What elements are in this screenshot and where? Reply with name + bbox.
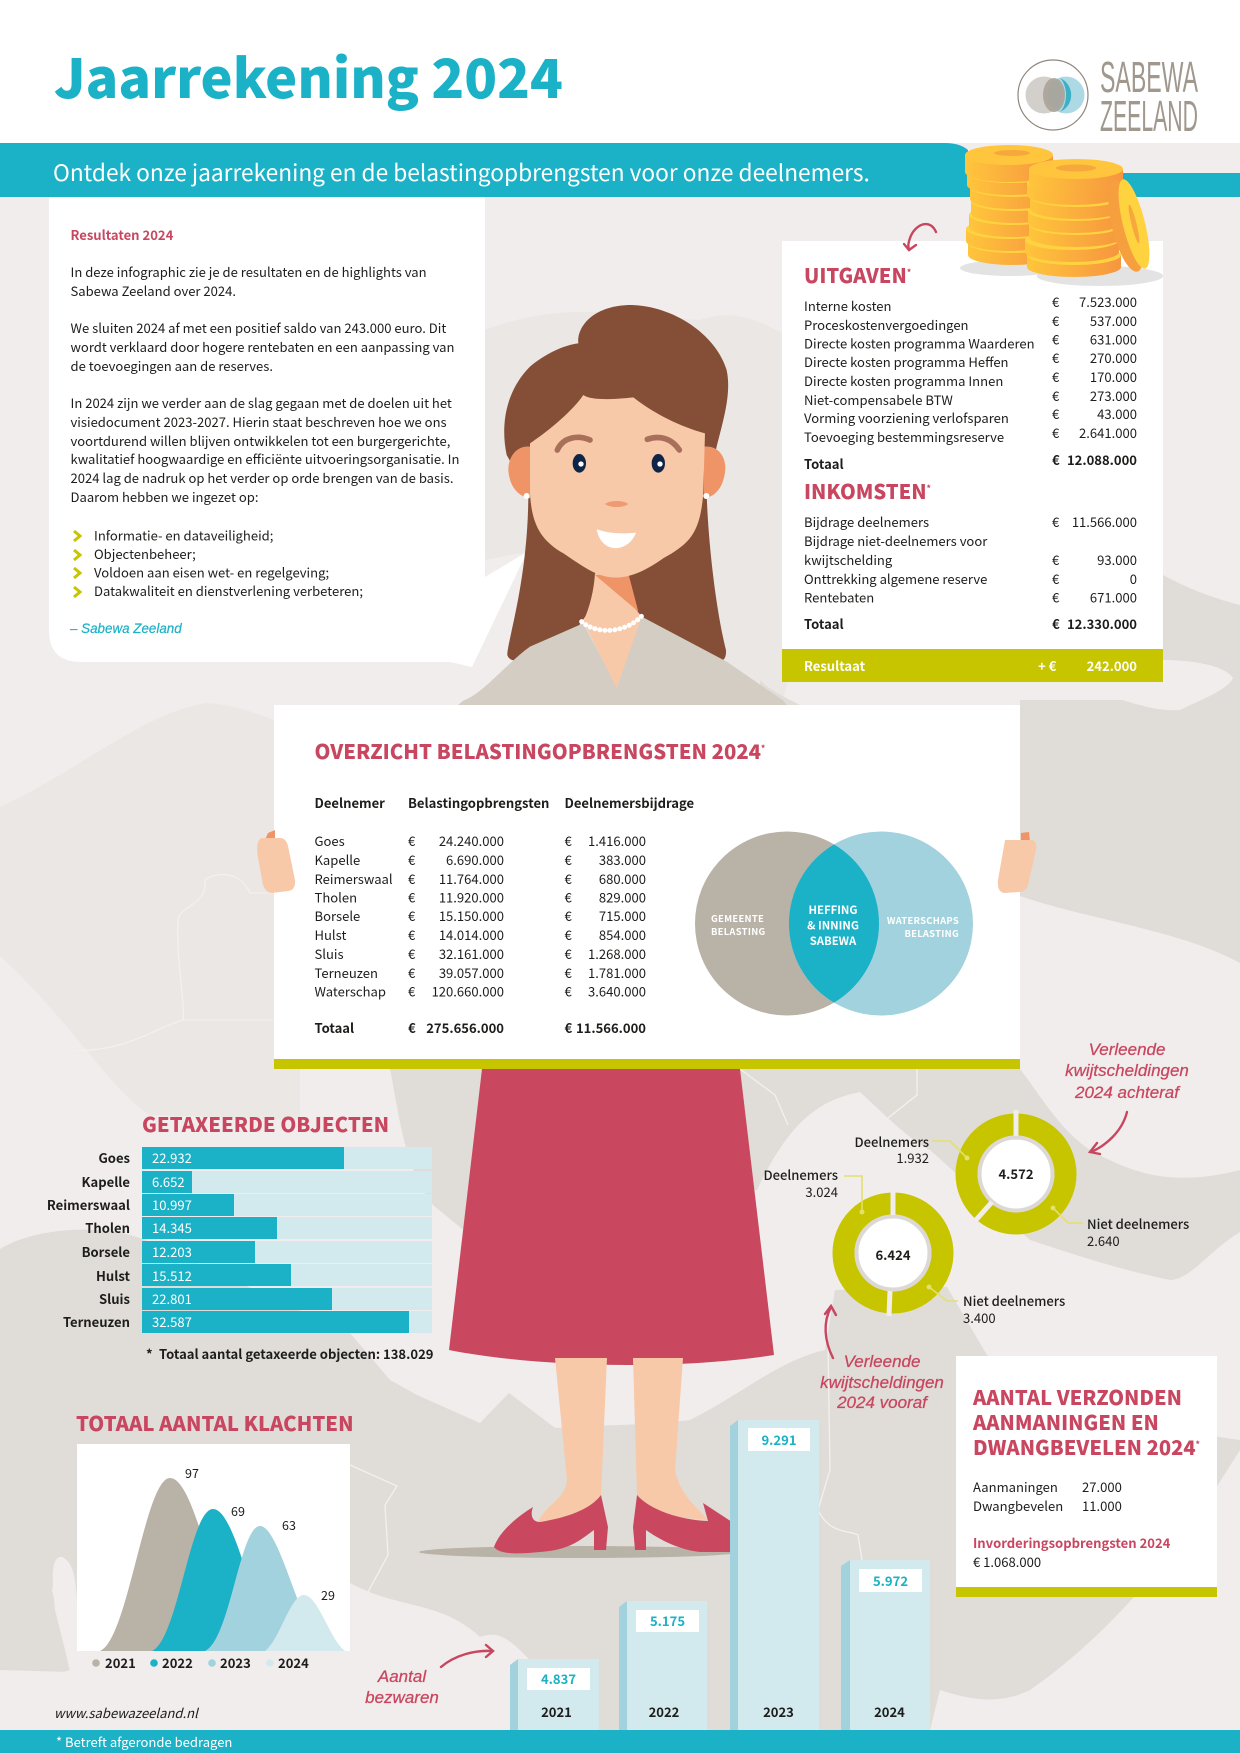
hand left <box>257 830 295 893</box>
table: belastingopbrengsten: Belastingopbrengsten <box>408 793 549 812</box>
bar labels: 14.345 <box>152 1218 192 1237</box>
table: belastingopbrengsten: € <box>408 925 416 944</box>
venn diagram: SABEWA <box>810 933 857 949</box>
table: uitgaven: Proceskostenvergoedingen <box>804 315 969 334</box>
table: belastingopbrengsten: Borsele <box>314 906 360 925</box>
table: belastingopbrengsten: 11.566.000 <box>576 1018 646 1037</box>
bar labels: Sluis <box>99 1289 131 1308</box>
hand right <box>998 832 1036 893</box>
bar 2022 <box>619 1601 707 1730</box>
panel: overzicht belastingopbrengsten <box>274 705 1020 1069</box>
body text <box>70 262 459 506</box>
table: belastingopbrengsten: 1.781.000 <box>588 963 646 982</box>
table: uitgaven: Toevoeging bestemmingsreserve <box>804 427 1004 446</box>
table: belastingopbrengsten: Hulst <box>314 925 346 944</box>
table: inkomsten: Rentebaten <box>804 588 874 606</box>
signature: – Sabewa Zeeland <box>69 621 182 636</box>
legend: 2022 <box>162 1653 193 1672</box>
table: belastingopbrengsten: € <box>408 888 416 906</box>
table: uitgaven: € <box>1052 423 1060 442</box>
heading: aanmaningen: DWANGBEVELEN 2024 <box>973 1432 1196 1461</box>
value labels <box>185 1463 335 1604</box>
counts: 11.000 <box>1082 1496 1122 1515</box>
table: belastingopbrengsten: € <box>564 944 572 963</box>
bullet list: Voldoen aan eisen wet- en regelgeving; <box>94 562 329 582</box>
bar labels: 10.997 <box>152 1195 192 1214</box>
table: belastingopbrengsten: € <box>408 1018 416 1037</box>
table: belastingopbrengsten: 680.000 <box>599 869 646 888</box>
invordering <box>973 1533 1171 1571</box>
table: inkomsten: € <box>1052 588 1060 606</box>
table: belastingopbrengsten: Deelnemer <box>314 793 385 812</box>
panel: aanmaningen en dwangbevelen <box>956 1356 1217 1597</box>
callout: kwijtscheldingen vooraf <box>820 1306 944 1412</box>
table: belastingopbrengsten: € <box>564 963 572 982</box>
counts: Aanmaningen <box>973 1477 1058 1496</box>
table: uitgaven: Niet-compensabele BTW <box>804 390 953 409</box>
table: uitgaven: € <box>1052 292 1060 311</box>
subtitle band: Ontdek onze jaarrekening en de belastingopbrengsten voor onze deelnemers. <box>53 155 870 188</box>
callout: aantal bezwaren: bezwaren <box>365 1688 439 1707</box>
header white area <box>0 0 1240 143</box>
table: inkomsten: Totaal <box>804 614 844 633</box>
table: uitgaven: € <box>1052 348 1060 367</box>
table: belastingopbrengsten: € <box>564 831 572 850</box>
heading: klachten: TOTAAL AANTAL KLACHTEN <box>76 1407 354 1437</box>
table: belastingopbrengsten: € <box>564 906 572 925</box>
illustration: woman upper body <box>452 305 791 710</box>
body text: de toevoegingen aan de reserves. <box>70 356 273 375</box>
table: uitgaven: Directe kosten programma Innen <box>804 371 1003 390</box>
body text: visiedocument 2023-2027. Hierin staat beschreven hoe we ons <box>70 412 447 431</box>
table: belastingopbrengsten: € <box>564 850 572 869</box>
chart: getaxeerde objecten <box>47 1108 434 1363</box>
table: inkomsten: 93.000 <box>1097 550 1137 569</box>
table: belastingopbrengsten: Reimerswaal <box>314 869 393 888</box>
venn diagram: GEMEENTE <box>711 911 764 925</box>
table: belastingopbrengsten: 14.014.000 <box>439 925 504 944</box>
table: belastingopbrengsten: 3.640.000 <box>588 982 646 1000</box>
bar 2024 <box>841 1560 930 1730</box>
body text: kwalitatief hoogwaardige en efficiënte uitvoeringsorganisatie. In <box>70 449 459 468</box>
bar labels: 12.203 <box>152 1242 192 1261</box>
heading: overzicht: * <box>761 743 765 754</box>
bar labels: 32.587 <box>152 1312 192 1331</box>
donut: kwijtscheldingen vooraf: 6.424 <box>875 1245 911 1264</box>
bar labels: Kapelle <box>82 1172 130 1191</box>
counts <box>973 1477 1122 1515</box>
bar 2023 <box>730 1420 819 1730</box>
bar 2024: 5.972 <box>873 1571 908 1590</box>
table: belastingopbrengsten: Goes <box>314 831 345 850</box>
donut: kwijtscheldingen achteraf: Niet deelnemers <box>1087 1214 1189 1233</box>
table: inkomsten: kwijtschelding <box>804 550 893 569</box>
venn diagram: BELASTING <box>711 924 766 938</box>
value labels: 63 <box>282 1515 296 1534</box>
bar labels: Reimerswaal <box>47 1195 130 1214</box>
table: belastingopbrengsten: € <box>408 850 416 869</box>
donut: kwijtscheldingen vooraf: Deelnemers <box>763 1165 838 1184</box>
callout: aantal bezwaren <box>365 1645 493 1707</box>
heading: inkomsten: INKOMSTEN <box>804 476 927 505</box>
bar labels: 22.932 <box>152 1148 192 1167</box>
table: inkomsten: 11.566.000 <box>1072 512 1137 531</box>
value labels: 29 <box>321 1585 335 1604</box>
body text: In deze infographic zie je de resultaten en de highlights van <box>70 262 427 281</box>
bullet list: Informatie- en dataveiligheid; <box>94 526 273 544</box>
table: uitgaven: 631.000 <box>1090 330 1137 348</box>
footer band <box>0 1730 1240 1753</box>
value labels: 69 <box>231 1501 245 1520</box>
table: uitgaven: Directe kosten programma Heffen <box>804 352 1009 371</box>
table: uitgaven: 170.000 <box>1090 367 1137 386</box>
table: belastingopbrengsten: € <box>408 963 416 982</box>
bar labels: Terneuzen <box>63 1312 130 1331</box>
table: uitgaven: Vorming voorziening verlofsparen <box>804 408 1009 427</box>
callout: kwijtscheldingen achteraf: kwijtscheldingen <box>1065 1061 1189 1080</box>
table: belastingopbrengsten: 6.690.000 <box>446 850 504 869</box>
body text: 2024 lag de nadruk op het verder op orde brengen van de basis. <box>70 468 453 487</box>
callout: kwijtscheldingen achteraf: Verleende <box>1089 1040 1165 1059</box>
callout: kwijtscheldingen achteraf <box>1065 1040 1189 1154</box>
area: 2021 <box>100 1478 240 1651</box>
heading: getaxeerde objecten: GETAXEERDE OBJECTEN <box>142 1108 389 1138</box>
venn diagram: HEFFING <box>808 902 858 918</box>
bar 2023: 2023 <box>763 1702 794 1721</box>
table: belastingopbrengsten: € <box>564 888 572 906</box>
table: uitgaven: 12.088.000 <box>1067 450 1137 469</box>
callout: kwijtscheldingen vooraf: 2024 vooraf <box>836 1393 929 1412</box>
legend: 2021 <box>105 1653 136 1672</box>
table: uitgaven: Directe kosten programma Waarderen <box>804 334 1035 352</box>
table: uitgaven: 273.000 <box>1090 386 1137 405</box>
result row: + € <box>1038 656 1057 675</box>
legend: 2023 <box>220 1653 251 1672</box>
table: inkomsten: Onttrekking algemene reserve <box>804 569 987 588</box>
body text: Daarom hebben we ingezet op: <box>70 487 258 506</box>
body text: voortdurend willen blijven ontwikkelen tot een burgergerichte, <box>70 431 450 450</box>
heading: uitgaven: UITGAVEN <box>804 260 907 289</box>
table: belastingopbrengsten: € <box>408 831 416 850</box>
donut: kwijtscheldingen achteraf: Deelnemers <box>854 1132 929 1151</box>
table: inkomsten: € <box>1052 614 1060 633</box>
legend: 2024 <box>278 1653 309 1672</box>
table: belastingopbrengsten: € <box>408 869 416 888</box>
table: uitgaven: € <box>1052 311 1060 330</box>
table: belastingopbrengsten: 854.000 <box>599 925 646 944</box>
heading: inkomsten: * <box>927 483 931 494</box>
callout: kwijtscheldingen achteraf: 2024 achteraf <box>1074 1083 1181 1102</box>
panel: resultaten 2024 <box>49 197 527 667</box>
chart: aantal bezwaren bars <box>510 1420 930 1730</box>
table: inkomsten: Bijdrage deelnemers <box>804 512 929 531</box>
table: belastingopbrengsten: € <box>408 906 416 925</box>
table: inkomsten: € <box>1052 569 1060 588</box>
callout: kwijtscheldingen vooraf: kwijtscheldingen <box>820 1373 944 1392</box>
counts: 27.000 <box>1082 1477 1122 1496</box>
donut: kwijtscheldingen vooraf: Niet deelnemers <box>963 1291 1065 1310</box>
table: uitgaven: € <box>1052 367 1060 386</box>
table: uitgaven: € <box>1052 404 1060 423</box>
area: 2023 <box>205 1526 325 1651</box>
table: belastingopbrengsten: Sluis <box>314 944 344 963</box>
table: inkomsten <box>804 512 1137 633</box>
bullet list: Datakwaliteit en dienstverlening verbeteren; <box>94 581 363 600</box>
table: inkomsten: € <box>1052 550 1060 569</box>
table: belastingopbrengsten: 1.268.000 <box>588 944 646 963</box>
table: belastingopbrengsten: 39.057.000 <box>439 963 504 982</box>
table: inkomsten: 671.000 <box>1090 588 1137 606</box>
table: belastingopbrengsten: € <box>408 944 416 963</box>
total note: * <box>146 1344 153 1363</box>
bar 2021: 2021 <box>541 1702 572 1721</box>
table: uitgaven: € <box>1052 386 1060 405</box>
icon: coin stacks <box>960 145 1163 286</box>
bullet list: Objectenbeheer; <box>94 544 196 563</box>
illustration: legs and shoes <box>419 1358 741 1558</box>
legend <box>92 1653 309 1672</box>
table: uitgaven: 43.000 <box>1097 404 1137 423</box>
table: belastingopbrengsten: € <box>564 982 572 1000</box>
heading: aanmaningen: AANMANINGEN EN <box>972 1407 1159 1436</box>
heading: overzicht: OVERZICHT BELASTINGOPBRENGSTEN 2024 <box>314 735 761 765</box>
result row <box>804 656 1137 675</box>
table: belastingopbrengsten: 15.150.000 <box>439 906 504 925</box>
table: belastingopbrengsten: 383.000 <box>599 850 646 869</box>
table: inkomsten: € <box>1052 512 1060 531</box>
footer band: * Betreft afgeronde bedragen <box>56 1732 232 1751</box>
bar 2021: 4.837 <box>541 1669 576 1688</box>
invordering: € 1.068.000 <box>973 1552 1041 1571</box>
total note: Totaal aantal getaxeerde objecten: 138.029 <box>159 1344 434 1363</box>
chart: totaal aantal klachten <box>76 1407 354 1672</box>
table: belastingopbrengsten: 120.660.000 <box>432 982 504 1000</box>
donut: kwijtscheldingen vooraf: 3.024 <box>805 1182 838 1201</box>
table: uitgaven: € <box>1052 330 1060 348</box>
table: belastingopbrengsten: Waterschap <box>314 982 386 1000</box>
bar labels <box>47 1148 192 1331</box>
heading: resultaten: Resultaten 2024 <box>70 225 174 244</box>
heading: aanmaningen: AANTAL VERZONDEN <box>972 1382 1182 1411</box>
table: inkomsten: 0 <box>1130 569 1137 588</box>
value labels: 97 <box>185 1463 199 1482</box>
table: belastingopbrengsten: € <box>564 869 572 888</box>
donut: kwijtscheldingen vooraf: 3.400 <box>963 1308 996 1327</box>
result row: 242.000 <box>1087 656 1137 675</box>
arrow: to uitgaven <box>904 224 936 250</box>
bars <box>142 1147 432 1333</box>
table: uitgaven: € <box>1052 450 1060 469</box>
table: belastingopbrengsten: 829.000 <box>599 888 646 906</box>
venn diagram: WATERSCHAPS <box>887 913 959 927</box>
subtitle band <box>0 143 1240 197</box>
area: 2022 <box>152 1509 275 1651</box>
donut: kwijtscheldingen achteraf <box>854 1110 1189 1250</box>
body text: wordt verklaard door hogere rentebaten en een aanpassing van <box>70 337 454 356</box>
venn diagram: BELASTING <box>904 926 959 940</box>
table: belastingopbrengsten: € <box>564 925 572 944</box>
table: belastingopbrengsten: 1.416.000 <box>588 831 646 850</box>
title: Jaarrekening 2024 <box>54 35 563 114</box>
bar labels: Tholen <box>85 1218 130 1237</box>
table: uitgaven <box>804 292 1137 473</box>
table: belastingopbrengsten: 11.764.000 <box>439 869 504 888</box>
body text: In 2024 zijn we verder aan de slag gegaan met de doelen uit het <box>70 393 452 412</box>
table: uitgaven: Interne kosten <box>804 296 891 315</box>
heading: aanmaningen: * <box>1196 1439 1200 1450</box>
body text: Sabewa Zeeland over 2024. <box>70 281 236 300</box>
invordering: Invorderingsopbrengsten 2024 <box>973 1533 1171 1552</box>
bar 2022: 2022 <box>649 1702 680 1721</box>
table: belastingopbrengsten: 275.656.000 <box>426 1018 504 1037</box>
area: 2024 <box>265 1595 345 1651</box>
table: belastingopbrengsten: € <box>564 1018 572 1037</box>
venn diagram <box>695 832 973 1016</box>
donut: kwijtscheldingen achteraf: 2.640 <box>1087 1231 1120 1250</box>
bar labels: Borsele <box>82 1242 130 1261</box>
table: belastingopbrengsten: 24.240.000 <box>439 831 504 850</box>
table: belastingopbrengsten: € <box>408 982 416 1000</box>
body text: We sluiten 2024 af met een positief saldo van 243.000 euro. Dit <box>70 318 446 337</box>
bar labels: 6.652 <box>152 1172 185 1191</box>
bar labels: Hulst <box>96 1266 131 1285</box>
heading: uitgaven: * <box>907 267 911 278</box>
donut: kwijtscheldingen vooraf <box>763 1165 1065 1327</box>
table: belastingopbrengsten: Terneuzen <box>314 963 378 982</box>
bar labels: 15.512 <box>152 1266 192 1285</box>
table: uitgaven: Totaal <box>804 454 844 473</box>
result row: Resultaat <box>804 656 866 675</box>
table: inkomsten: Bijdrage niet-deelnemers voor <box>804 531 988 550</box>
table: uitgaven: 537.000 <box>1090 311 1137 330</box>
table: belastingopbrengsten: Totaal <box>314 1018 354 1037</box>
table: belastingopbrengsten: Tholen <box>314 888 357 906</box>
callout: aantal bezwaren: Aantal <box>377 1667 427 1686</box>
bullet list <box>74 526 363 600</box>
logo: Sabewa Zeeland <box>1018 53 1198 141</box>
table: belastingopbrengsten: 715.000 <box>599 906 646 925</box>
table: belastingopbrengsten: Deelnemersbijdrage <box>564 793 695 812</box>
table: belastingopbrengsten: 11.920.000 <box>439 888 504 906</box>
table: inkomsten: 12.330.000 <box>1067 614 1137 633</box>
table: belastingopbrengsten: 32.161.000 <box>439 944 504 963</box>
bar 2021 <box>510 1659 599 1730</box>
venn diagram: & INNING <box>807 918 859 934</box>
illustration: skirt <box>449 1069 774 1365</box>
donut: kwijtscheldingen achteraf: 4.572 <box>998 1164 1034 1183</box>
table: uitgaven: 2.641.000 <box>1079 423 1137 442</box>
website: www.sabewazeeland.nl <box>54 1703 200 1722</box>
counts: Dwangbevelen <box>973 1496 1063 1515</box>
bar 2024: 2024 <box>874 1702 905 1721</box>
bar labels: Goes <box>98 1148 131 1167</box>
heading: aanmaningen <box>972 1382 1200 1461</box>
bar 2023: 9.291 <box>761 1430 797 1449</box>
bar 2022: 5.175 <box>650 1611 685 1630</box>
table: belastingopbrengsten: Kapelle <box>314 850 360 869</box>
table: uitgaven: 270.000 <box>1090 348 1137 367</box>
donut: kwijtscheldingen achteraf: 1.932 <box>896 1148 929 1167</box>
panel: uitgaven en inkomsten <box>782 241 1163 682</box>
table: belastingopbrengsten <box>314 793 695 1037</box>
table: uitgaven: 7.523.000 <box>1079 292 1137 311</box>
bar labels: 22.801 <box>152 1289 192 1308</box>
callout: kwijtscheldingen vooraf: Verleende <box>844 1352 920 1371</box>
